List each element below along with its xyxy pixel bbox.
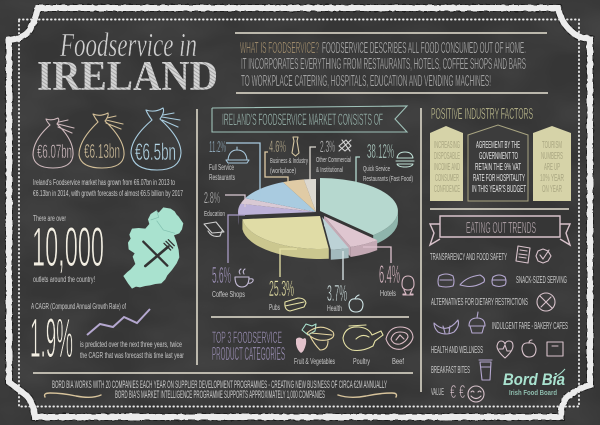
slice: quick service (320, 178, 398, 245)
panel: positive industry factors: INCREASING (434, 140, 460, 151)
heading (212, 328, 285, 364)
icon: cloche (226, 147, 249, 163)
panel: top 3 product categories: TOP 3 FOODSERVICE (212, 328, 282, 347)
panel: positive industry factors: DISPOSABLE (434, 151, 460, 162)
label: quick service restaurants: 38.12% (367, 141, 394, 163)
trend: transparency (430, 246, 551, 263)
label: full service restaurants: Restaurants (209, 173, 235, 182)
label: hotels (363, 247, 414, 298)
icon: knife and fork (143, 240, 174, 266)
label: education (204, 190, 245, 236)
stat: outlets: outlets around the country! (33, 275, 95, 284)
market heading banner (212, 106, 407, 132)
icon: cutlery cluster (339, 140, 351, 151)
factor: VAT rate: GOVERNMENT TO (479, 151, 518, 162)
icon: apple (349, 295, 363, 312)
label: quick service restaurants (356, 141, 414, 185)
factor: VAT rate: RETAIN THE 9% VAT (475, 162, 521, 173)
factor: tourism: TOURISM (542, 140, 562, 151)
panel: positive industry factors (430, 106, 571, 201)
map of Ireland (123, 207, 183, 289)
title (37, 27, 218, 100)
slice: full service (245, 182, 316, 212)
label: pubs (269, 249, 306, 312)
logo: Bord Bia: Irish Food Board (509, 390, 557, 397)
label: education: Education (204, 209, 225, 218)
trend: health and wellness (431, 340, 563, 358)
label: quick service restaurants: Restaurants (Fast Food) (363, 174, 413, 183)
slice: pubs (242, 216, 329, 259)
icons: snacks (438, 274, 506, 287)
text: market growth description: €6.13bn in 2014, with growth forecasts of almost €6.5 billion by 2017 (33, 189, 183, 198)
trend: value (431, 382, 484, 402)
label: business and industry: 4.6% (269, 137, 286, 156)
icon: prohibited (537, 293, 555, 311)
logo: Bord Bia (503, 369, 565, 397)
slice: other (304, 179, 316, 212)
CAGR explanation: is predicted over the next three years, twice (80, 340, 182, 349)
trend: indulgent fare (434, 312, 568, 334)
footer text (52, 379, 387, 401)
trend: breakfast bites (431, 360, 492, 380)
icons: croissant and cupcake (434, 312, 485, 334)
category labels: Beef (392, 357, 405, 366)
trend: dietary (431, 293, 555, 311)
slice: health (322, 217, 349, 260)
bag 2017: €6.5bn (135, 139, 176, 166)
slice: hotels (324, 216, 377, 257)
panel: positive industry factors: RATE FOR HOSPITALITY (473, 173, 525, 184)
panel: market growth money bags (33, 108, 181, 170)
eating out trends banner (430, 216, 570, 245)
panel: positive industry factors: CONSUMER (435, 173, 459, 184)
factor: tourism: NUMBERS (541, 151, 563, 162)
label: health (327, 251, 363, 313)
trend: value: € € (450, 382, 465, 402)
slice: education (240, 198, 316, 212)
factor: VAT rate: AGREEMENT BY THE (476, 140, 520, 151)
icon: quality badge (536, 249, 551, 263)
icon: poultry (343, 325, 383, 350)
label: quick service restaurants: Quick Service (363, 164, 390, 173)
label: pubs: 25.3% (269, 276, 294, 301)
label: business and industry (265, 137, 308, 183)
footer swashes (45, 393, 397, 397)
title block line: IRELAND (37, 54, 218, 100)
icon: takeaway cup (479, 360, 492, 380)
trend: health and wellness: HEALTH AND WELLNESS (431, 345, 483, 356)
label: hotels: Hotels (380, 289, 396, 298)
factor: tourism (533, 126, 571, 201)
panel: positive industry factors: CONFIDENCE (434, 184, 460, 195)
label: health: 3.7% (327, 280, 347, 306)
label: coffee shops: 5.6% (212, 262, 231, 288)
label: health: Health (327, 304, 342, 313)
icon: mortarboard (204, 222, 224, 236)
icon: document (516, 246, 530, 263)
factor: tourism: ON YEAR (542, 184, 562, 195)
label: hotels: 6.4% (379, 261, 400, 289)
CAGR explanation: the CAGR that was forecast this time last year (80, 351, 184, 360)
trend: breakfast bites: BREAKFAST BITES (431, 365, 470, 376)
bag 2013 (33, 118, 74, 168)
icon: smiley (468, 386, 484, 402)
panel: top 3 product categories (212, 324, 413, 366)
intro text: what is foodservice (240, 40, 526, 90)
slice: coffee shops (238, 204, 316, 225)
title script line: Foodservice in (59, 27, 197, 64)
label: education: 2.8% (204, 190, 220, 207)
factor: tourism: ARE UP (544, 162, 560, 173)
slice: business (283, 179, 316, 212)
icon: coffee cup (235, 269, 253, 287)
label: other commercial (310, 137, 351, 180)
bag 2013: €6.07bn (37, 142, 72, 163)
logo: Bord Bia: Bord Bia (503, 370, 565, 389)
text: market growth description: Ireland's Foodservice market has grown from €6.07bn in 2013 to (33, 178, 175, 187)
text: market growth description (33, 178, 183, 198)
factor: tourism: 10% YEAR (540, 173, 564, 184)
stat: outlets (32, 214, 104, 284)
trend: value: VALUE (431, 387, 444, 398)
bag 2014: €6.13bn (84, 141, 120, 163)
label: coffee shops: Coffee Shops (212, 290, 245, 299)
panel: positive industry factors: IN THIS YEAR'S BUDGET (472, 184, 526, 195)
bag 2014 (79, 113, 124, 168)
icon: egg cup (402, 276, 414, 295)
label: pubs: Pubs (269, 303, 280, 312)
intro text: what is foodservice: WHAT IS FOODSERVICE? (240, 40, 319, 57)
label: coffee shops (212, 215, 253, 299)
icons: heart, apple, scales (497, 340, 563, 358)
label: other commercial: Other Commercial (316, 155, 351, 164)
bag 2017 (131, 108, 181, 170)
label: other commercial: 2.3% (320, 137, 335, 156)
label: other commercial: & Institutional (316, 165, 343, 174)
label: business and industry: (workplace) (270, 166, 296, 175)
divider above top 3 (211, 316, 409, 318)
line chart (87, 309, 150, 335)
CAGR explanation (80, 340, 184, 360)
stat: CAGR: A CAGR (Compound Annual Growth Rate) of (31, 302, 126, 311)
factor: VAT rate (468, 125, 528, 201)
text: 10,000 (32, 215, 104, 278)
panel: top 3 product categories: PRODUCT CATEGORIES (212, 344, 285, 364)
category labels: Poultry (353, 357, 370, 366)
panel: positive industry factors: INCOME AND (434, 162, 460, 173)
category labels: Fruit & Vegetables (294, 357, 335, 366)
trend: snack sized (438, 274, 567, 287)
label: full service restaurants: Full Service (209, 163, 234, 172)
label: full service restaurants (209, 139, 260, 197)
panel: trends list (430, 246, 568, 402)
icon: fruit and vegetables (296, 324, 334, 353)
label: business and industry: Business & Industry (270, 156, 308, 165)
label: full service restaurants: 11.2% (209, 139, 226, 156)
icon: tie (292, 137, 299, 156)
stat: outlets: There are over (33, 214, 66, 223)
section dividers (33, 33, 548, 392)
factor: disposable income (430, 126, 463, 201)
stat: CAGR: 1.9% (30, 306, 73, 369)
icon: burger (396, 152, 414, 167)
pie chart (238, 178, 398, 260)
icon: sandwich (285, 298, 306, 311)
category labels (294, 357, 405, 366)
icon: beef (386, 327, 413, 349)
